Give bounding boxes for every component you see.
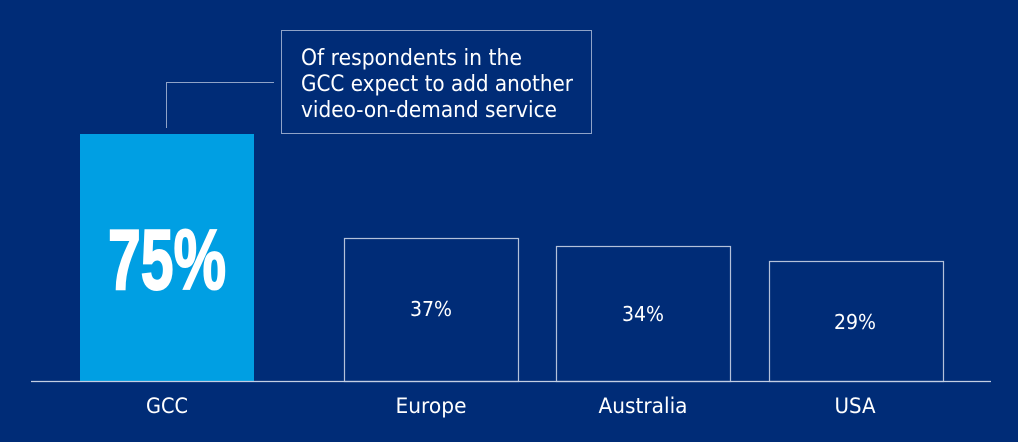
bar: GCC 75%: 75% bbox=[108, 213, 226, 308]
bar: Europe 37%: 37% bbox=[410, 297, 452, 321]
bar: Australia 34% bbox=[556, 246, 730, 382]
axis label: Australia: Australia bbox=[598, 394, 688, 418]
callout: description of 75%: GCC expect to add another bbox=[301, 72, 574, 97]
bar: USA 29% bbox=[770, 262, 944, 382]
callout: description of 75%: video-on-demand service bbox=[301, 98, 557, 123]
bar: Europe 37% bbox=[344, 238, 518, 382]
axis label: USA: USA bbox=[834, 394, 876, 418]
axis label: GCC: GCC bbox=[146, 394, 188, 418]
bar: USA 29%: 29% bbox=[834, 310, 876, 334]
axis baseline bbox=[31, 380, 991, 382]
axis label: Europe: Europe bbox=[396, 394, 466, 418]
bar: Australia 34%: 34% bbox=[622, 302, 664, 326]
callout: description of 75% bbox=[282, 30, 592, 134]
bar: GCC 75% bbox=[80, 134, 254, 381]
callout: description of 75%: Of respondents in the bbox=[301, 46, 522, 71]
callout connector line bbox=[166, 82, 274, 128]
